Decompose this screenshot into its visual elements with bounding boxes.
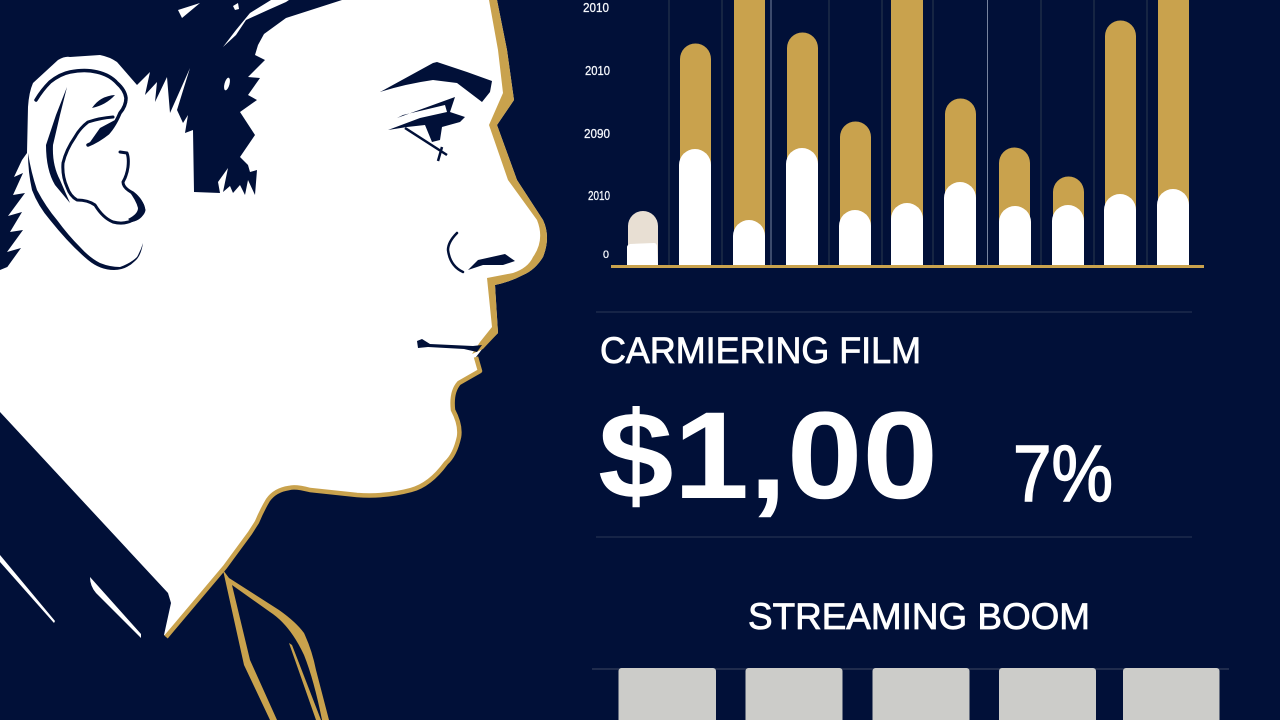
portrait illustration [0,0,547,720]
gold stacked bars [628,0,1189,265]
eyebrow [380,62,492,102]
heading: film label: CARMIERING FILM [600,330,921,371]
chart gridlines [669,0,1147,265]
axis labels [583,0,610,261]
heading: streaming section: STREAMING BOOM [748,596,1090,637]
eye [388,97,465,161]
axis labels: 2010 [585,63,610,78]
mouth [417,339,482,352]
axis labels: 2010 [583,0,609,15]
big stat value: $1,00 [598,387,938,525]
bar chart [583,0,1204,268]
head silhouette [0,0,547,637]
collar lines [0,555,141,638]
nose [448,233,515,272]
ear [28,70,145,270]
gold face outline [166,0,547,637]
axis labels: 2090 [584,126,610,141]
white stacked bars [627,148,1189,265]
gold collar [223,570,329,720]
axis labels: 2010 [588,188,610,203]
streaming tiles [618,668,1220,720]
percentage stat: 7% [1013,429,1113,518]
chart baseline [611,265,1204,268]
hair highlights [178,0,289,91]
axis labels: 0 [603,249,609,261]
